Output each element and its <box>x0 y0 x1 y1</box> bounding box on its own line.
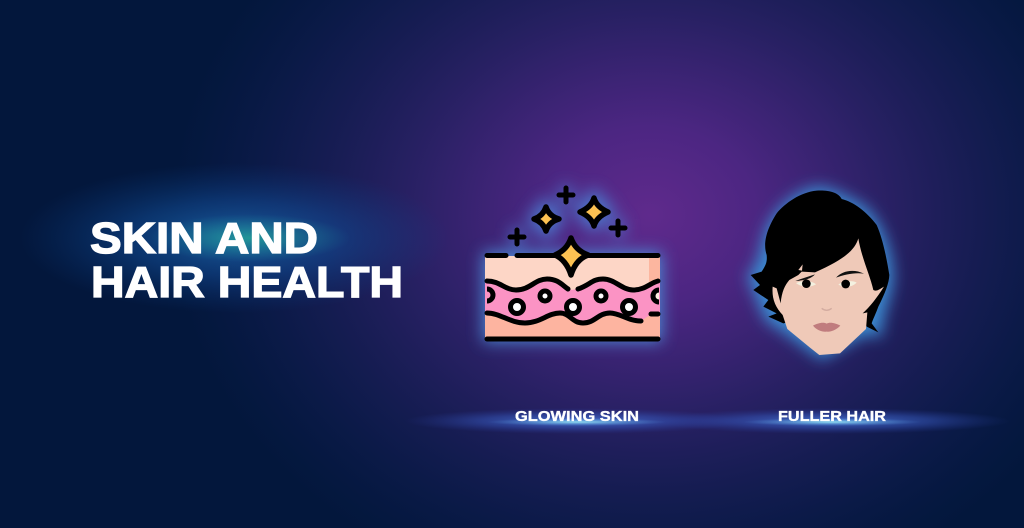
hair highlight <box>798 264 803 271</box>
label: glowing skin: GLOWING SKIN <box>515 409 639 425</box>
title: SKIN AND <box>90 214 318 263</box>
title: HAIR HEALTH <box>91 258 403 307</box>
plus marks <box>510 188 625 244</box>
right eye <box>838 280 857 288</box>
icon glow <box>483 186 662 342</box>
title <box>90 214 403 307</box>
cells <box>487 289 659 314</box>
blood layer <box>485 279 660 323</box>
face <box>772 238 884 355</box>
left eye <box>796 279 816 288</box>
right eyebrow <box>836 271 864 278</box>
glow line under labels <box>405 408 1010 434</box>
nose <box>822 308 832 310</box>
skin surface line <box>487 256 658 339</box>
icon glow <box>747 187 893 360</box>
icon: glowing skin <box>483 186 662 342</box>
vessel walls <box>487 279 658 323</box>
icon: face with fuller hair <box>747 187 893 360</box>
lips <box>813 323 840 332</box>
skin top layer <box>485 256 660 296</box>
sparkles <box>534 198 608 275</box>
left eyebrow <box>795 274 815 281</box>
hair <box>751 191 889 332</box>
skin bottom layer <box>485 308 660 339</box>
label: fuller hair: FULLER HAIR <box>778 409 887 425</box>
